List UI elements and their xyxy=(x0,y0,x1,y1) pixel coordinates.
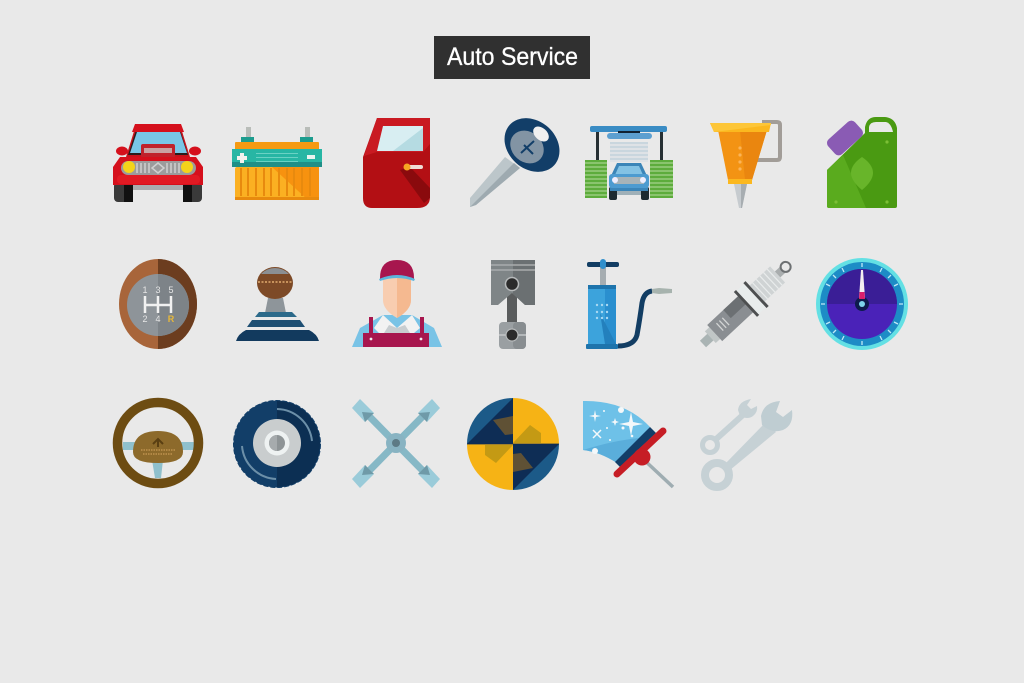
icon: spark plug xyxy=(691,251,801,356)
icon: oil canister xyxy=(825,117,897,208)
icon: car battery xyxy=(232,127,322,200)
icon: car wash xyxy=(585,126,673,200)
icon: car door xyxy=(363,118,430,208)
icon: oil funnel xyxy=(710,122,780,208)
icon: gear lever xyxy=(236,267,319,341)
icon: car key xyxy=(470,107,570,207)
icon: pinwheel wheel rim xyxy=(467,398,559,490)
icon: gear shift knob: 1 xyxy=(142,285,148,295)
icon: tyre xyxy=(234,400,320,488)
title xyxy=(434,36,590,79)
icon: wrenches xyxy=(702,399,792,487)
icon: windshield wiper xyxy=(583,401,673,487)
icon: cross lug wrench xyxy=(352,399,440,488)
icon: mechanic xyxy=(352,260,442,347)
icon: gear shift knob: 3 xyxy=(155,285,161,295)
icon: red car xyxy=(113,124,203,202)
title: Auto Service xyxy=(447,43,578,71)
icon: air pump xyxy=(586,259,672,349)
icon: gear shift knob: R xyxy=(168,314,175,324)
icon: steering wheel xyxy=(118,402,198,484)
icon: gear shift knob: 5 xyxy=(168,285,174,295)
icon: speedometer gauge xyxy=(816,258,908,350)
icon: engine piston xyxy=(491,260,535,349)
icon: gear shift knob: 2 xyxy=(142,314,148,324)
icon: gear shift knob: 4 xyxy=(155,314,161,324)
icon: gear shift knob xyxy=(119,259,197,349)
